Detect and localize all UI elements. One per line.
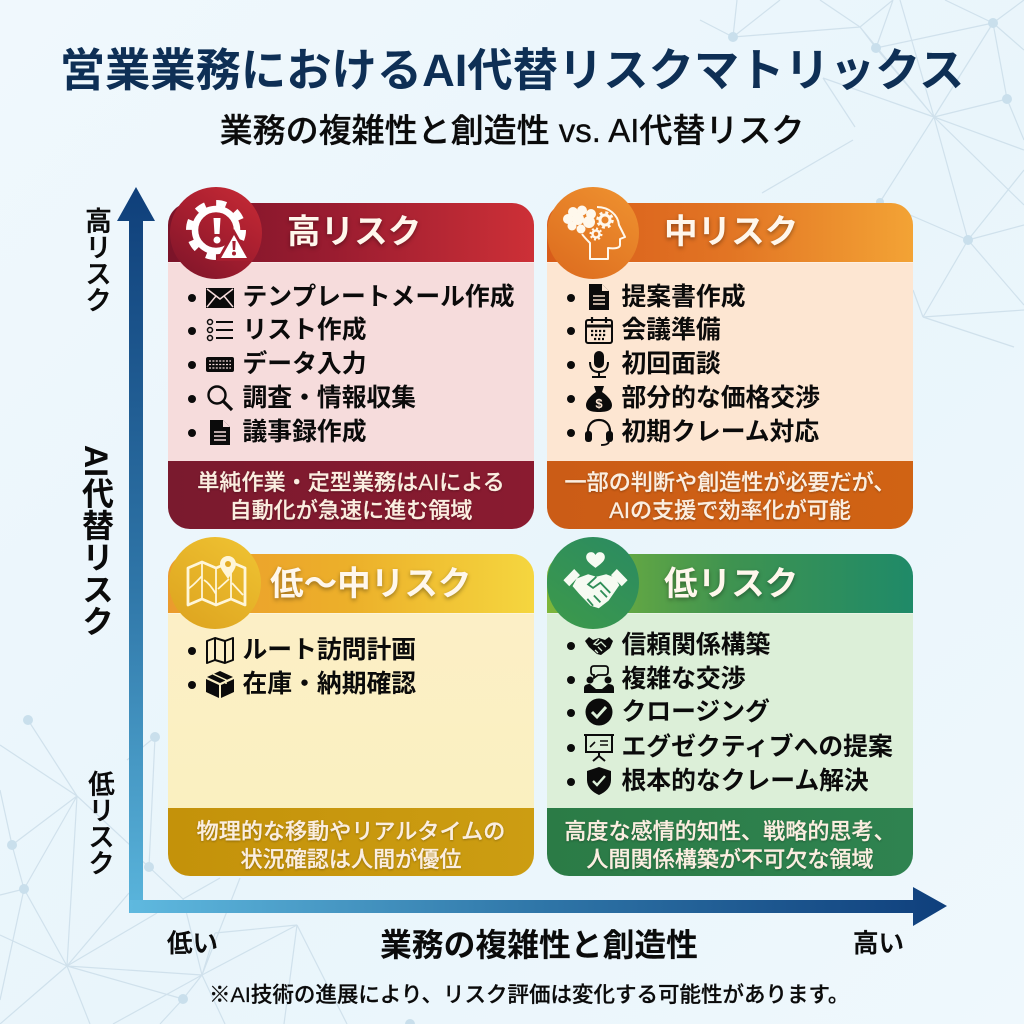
- item: data entry: データ入力: [242, 351, 366, 378]
- medium risk header: [547, 203, 913, 262]
- subtitle: 業務の複雑性と創造性 vs. AI代替リスク: [220, 112, 804, 149]
- medium risk summary: [564, 470, 895, 523]
- item: meeting preparation: 会議準備: [622, 317, 721, 344]
- high risk summary: [197, 470, 505, 523]
- low to medium risk summary: [196, 819, 505, 872]
- item: minutes: [188, 418, 366, 446]
- medium risk footer: [547, 461, 913, 529]
- high risk icon: gear with warning: [170, 187, 262, 279]
- x axis arrow: [143, 887, 947, 926]
- low risk summary: [564, 819, 896, 872]
- item: inventory check: 在庫・納期確認: [242, 671, 416, 698]
- item: template mail: テンプレートメール作成: [242, 284, 515, 311]
- low risk summary: 人間関係構築が不可欠な領域: [586, 847, 874, 872]
- item: route planning: ルート訪問計画: [242, 637, 416, 664]
- item: proposal: 提案書作成: [622, 284, 746, 311]
- x axis label: low: 低い: [167, 930, 218, 958]
- item: list: [188, 316, 366, 344]
- low to medium risk heading: 低〜中リスク: [270, 566, 471, 603]
- panel: medium risk: [547, 187, 913, 529]
- y axis arrow: [117, 187, 155, 913]
- item: first meeting: 初回面談: [622, 351, 721, 378]
- high risk header: [168, 203, 534, 262]
- item: initial complaint handling: 初期クレーム対応: [622, 419, 819, 446]
- item: list: リスト作成: [242, 317, 366, 344]
- item: first meeting: [567, 350, 721, 378]
- low risk footer: [547, 808, 913, 876]
- item: research: 調査・情報収集: [242, 385, 416, 412]
- low risk summary: 高度な感情的知性、戦略的思考、: [564, 819, 896, 844]
- panel: high risk: [168, 187, 534, 529]
- item: data entry: [188, 350, 366, 378]
- high risk summary: 単純作業・定型業務はAIによる: [197, 470, 505, 495]
- x axis label: high: 高い: [853, 930, 904, 958]
- item: minutes: 議事録作成: [242, 419, 366, 446]
- low to medium risk icon: map with pin: [169, 537, 261, 629]
- y axis label: low risk: 低リスク: [84, 770, 114, 876]
- low to medium risk body: [168, 613, 534, 812]
- y axis label: high risk: 高リスク: [81, 207, 111, 313]
- medium risk summary: 一部の判断や創造性が必要だが、: [565, 470, 895, 495]
- item: complex negotiation: [567, 665, 746, 693]
- low to medium risk summary: 状況確認は人間が優位: [241, 847, 461, 872]
- y axis title: AI代替リスク: [78, 445, 114, 637]
- item: price negotiation: 部分的な価格交渉: [622, 385, 820, 412]
- panel: low to medium risk: [168, 537, 534, 876]
- medium risk body: [547, 262, 913, 461]
- high risk heading: 高リスク: [287, 214, 421, 251]
- x axis title: 業務の複雑性と創造性: [380, 927, 698, 963]
- footnote: ※AI技術の進展により、リスク評価は変化する可能性があります。: [209, 983, 849, 1007]
- low risk icon: handshake with heart: [547, 537, 639, 629]
- medium risk heading: 中リスク: [664, 214, 798, 251]
- item: closing: クロージング: [622, 699, 770, 726]
- high risk summary: 自動化が急速に進む領域: [229, 498, 473, 523]
- item: price negotiation: $: [595, 396, 603, 411]
- low to medium risk footer: [168, 808, 534, 876]
- item: executive proposal: エグゼクティブへの提案: [622, 734, 893, 761]
- low risk header: [547, 554, 913, 613]
- title: 営業業務におけるAI代替リスクマトリックス: [60, 45, 964, 96]
- low risk heading: 低リスク: [664, 566, 798, 603]
- low to medium risk summary: 物理的な移動やリアルタイムの: [197, 819, 505, 844]
- low to medium risk header: [168, 554, 534, 613]
- item: proposal: [567, 283, 746, 311]
- item: complex negotiation: 複雑な交渉: [622, 666, 746, 693]
- medium risk summary: AIの支援で効率化が可能: [609, 498, 851, 523]
- panel: low risk: [547, 537, 913, 876]
- medium risk icon: head with brain: [547, 187, 639, 279]
- item: meeting preparation: [567, 316, 721, 344]
- high risk body: [168, 262, 534, 461]
- high risk footer: [168, 461, 534, 529]
- low risk body: [547, 613, 913, 812]
- item: root cause complaint resolution: 根本的なクレーム解決: [622, 768, 869, 795]
- item: building trust: 信頼関係構築: [622, 632, 770, 659]
